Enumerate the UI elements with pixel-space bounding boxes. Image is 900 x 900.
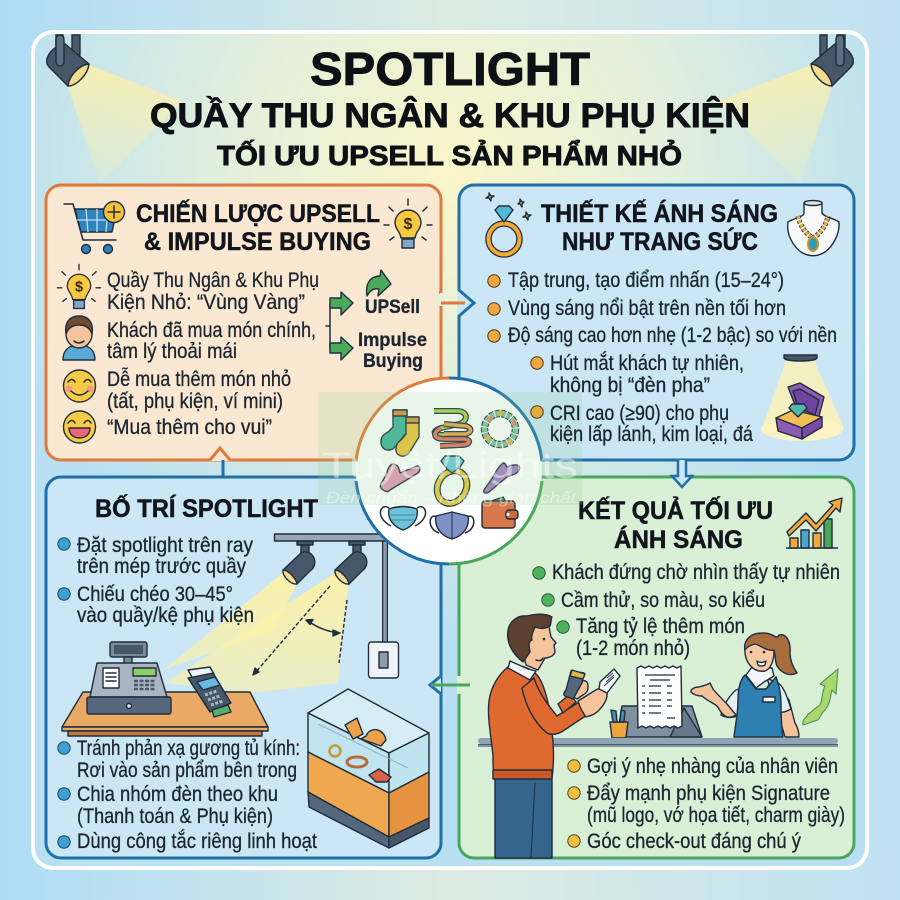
text: customer: tâm lý thoải mái xyxy=(107,340,237,363)
bullets: results top xyxy=(533,561,840,660)
bullet: high CRI: kiện lấp lánh, kim loại, đá xyxy=(550,423,753,446)
icon: idea bulb: $ xyxy=(404,216,413,233)
spotlight: top left xyxy=(47,35,182,184)
text: golden zone xyxy=(107,269,319,314)
panel: upsell strategy xyxy=(46,185,466,461)
icon: socks xyxy=(381,410,419,456)
bullets: lighting points xyxy=(488,269,837,397)
bullets: installation tips: (Thanh toán & Phụ kiện) xyxy=(77,805,273,828)
bullets: placement xyxy=(58,534,254,627)
watermark: Đèn chuẩn – Không gian chất xyxy=(326,489,577,507)
bullets: results bottom: Góc check-out đáng chú ý xyxy=(587,830,801,853)
icon: idea bulb xyxy=(384,199,432,248)
bullets: installation tips: Chia nhóm đèn theo khu xyxy=(77,783,278,806)
text: easy to buy xyxy=(107,368,291,413)
bullets: installation tips xyxy=(58,737,317,853)
panel: lighting design xyxy=(441,185,854,460)
icon: hair fork xyxy=(484,463,520,493)
bullet: high CRI xyxy=(531,402,753,446)
heading: THIẾT KẾ ÁNH SÁNG xyxy=(541,199,778,228)
icon: glass display case xyxy=(308,689,429,848)
illustration: counter top xyxy=(478,738,838,747)
bullets: results top: Tăng tỷ lệ thêm món xyxy=(576,615,745,638)
bullets: results top: (1-2 món nhỏ) xyxy=(576,637,690,660)
heading line 2: & IMPULSE BUYING xyxy=(144,228,371,256)
heading: KẾT QUẢ TỐI ƯU xyxy=(578,495,773,525)
text: customer: Khách đã mua món chính, xyxy=(107,319,316,342)
text: easy to buy: (tất, phụ kiện, ví mini) xyxy=(107,390,283,413)
bullet: high CRI: CRI cao (≥90) cho phụ xyxy=(550,402,729,425)
subtitle line 2: TỐI ƯU UPSELL SẢN PHẨM NHỎ xyxy=(217,139,682,171)
icon: laugh xyxy=(64,411,96,443)
subtitle line 1: QUẦY THU NGÂN & KHU PHỤ KIỆN xyxy=(150,97,750,135)
watermark xyxy=(318,392,582,507)
icon: diamond ring center xyxy=(431,456,473,509)
bullets: lighting points: Hút mắt khách tự nhiên, xyxy=(550,352,744,375)
text: buy for fun: “Mua thêm cho vui” xyxy=(107,416,272,439)
icon: small bulb xyxy=(57,264,101,308)
heading: CHIẾN LƯỢC UPSELL xyxy=(136,199,380,228)
illustration: green growth arrow xyxy=(803,669,838,725)
arrow: down to results xyxy=(672,460,692,487)
panel: results xyxy=(449,460,854,858)
heading: BỐ TRÍ SPOTLIGHT xyxy=(95,493,318,523)
icon: growth chart xyxy=(786,498,842,548)
arrows: upsell and impulse xyxy=(326,270,391,360)
icon: card terminal xyxy=(188,667,231,717)
icon: jewelry box under light xyxy=(761,355,844,441)
icon: small bulb: $ xyxy=(75,279,83,295)
title: SPOTLIGHT xyxy=(310,43,590,95)
illustration: till and receipt xyxy=(610,666,702,738)
illustration: customer xyxy=(488,614,620,858)
text: customer xyxy=(107,319,316,363)
labels: upsell and impulse: UPSell xyxy=(365,297,420,318)
icon: cash register xyxy=(87,642,171,714)
text: golden zone: Quầy Thu Ngân & Khu Phụ xyxy=(107,269,319,292)
bullets: placement: Đặt spotlight trên ray xyxy=(77,534,253,557)
bullets: results bottom: Đẩy mạnh phụ kiện Signature xyxy=(587,782,830,805)
heading line 2: ÁNH SÁNG xyxy=(614,525,743,554)
icon: smile xyxy=(64,370,96,402)
bullets: placement: vào quầy/kệ phụ kiện xyxy=(77,604,254,627)
bullets: results bottom xyxy=(568,755,845,853)
icon: wallet xyxy=(482,497,518,528)
center accessories circle xyxy=(356,378,542,564)
bullets: installation tips: Rơi vào sản phẩm bên trong xyxy=(77,759,297,782)
bullets: lighting points: không bị “đèn pha” xyxy=(550,374,710,397)
icon: customer xyxy=(63,316,95,360)
title xyxy=(150,43,750,171)
icon: fabric mask xyxy=(430,512,474,539)
light beams xyxy=(163,573,348,693)
bullets: results bottom: (mũ logo, vớ họa tiết, charm giày) xyxy=(587,804,845,827)
icon: bead bracelet xyxy=(484,410,517,445)
bullets: installation tips: Tránh phản xạ gương tủ kính: xyxy=(77,737,300,760)
track rail and spotlights xyxy=(274,534,386,642)
bullets: lighting points: Độ sáng cao hơn nhẹ (1-2 bậc) so với nền xyxy=(508,324,837,347)
icon: surgical mask xyxy=(380,506,426,530)
illustration: cashier xyxy=(691,633,799,737)
bullets: results top: Cầm thử, so màu, so kiểu xyxy=(561,589,765,612)
heading line 2: NHƯ TRANG SỨC xyxy=(562,226,758,256)
labels: upsell and impulse: Impulse xyxy=(358,330,427,351)
watermark: Tuyệt/Lights xyxy=(322,445,578,486)
bullets: placement: Chiếu chéo 30–45° xyxy=(77,583,233,606)
spotlight: top right xyxy=(718,35,853,184)
panel: spotlight placement xyxy=(46,460,470,858)
text: easy to buy: Dễ mua thêm món nhỏ xyxy=(107,368,291,391)
bullets: lighting points: Tập trung, tạo điểm nhấn (15–24°) xyxy=(508,269,784,292)
bullets: placement: trên mép trước quầy xyxy=(77,555,246,578)
icon: counter xyxy=(62,692,268,736)
icon: shoelaces xyxy=(434,411,470,446)
labels: upsell and impulse xyxy=(358,297,427,372)
text: golden zone: Kiện Nhỏ: “Vùng Vàng” xyxy=(107,291,305,314)
arrows: beam angle xyxy=(253,586,347,675)
icon: hair clip xyxy=(380,464,420,492)
icon: necklace bust xyxy=(788,200,839,256)
labels: upsell and impulse: Buying xyxy=(363,351,423,372)
bullets: results bottom: Gợi ý nhẹ nhàng của nhân viên xyxy=(587,755,838,778)
bullets: results top: Khách đứng chờ nhìn thấy tự nhiên xyxy=(552,561,840,584)
icon: shopping cart xyxy=(64,202,124,254)
icon: wall switch xyxy=(368,642,398,678)
bullets: lighting points: Vùng sáng nổi bật trên nền tối hơn xyxy=(508,297,786,320)
icon: diamond ring xyxy=(486,193,531,254)
bullets: installation tips: Dùng công tắc riêng linh hoạt xyxy=(77,830,317,853)
